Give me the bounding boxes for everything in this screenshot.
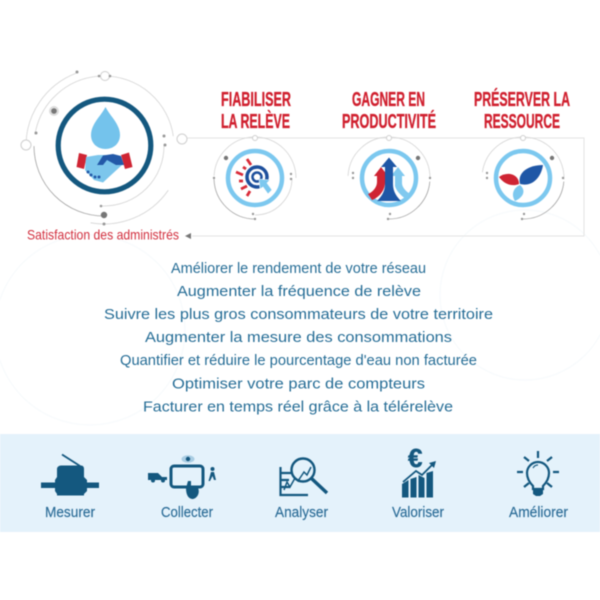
step: analyser bbox=[275, 458, 328, 521]
icon: leaves bbox=[499, 165, 543, 201]
panel: productivité badge bbox=[345, 134, 433, 222]
heading: fiabiliser bbox=[221, 88, 291, 133]
panel: ressource badge bbox=[477, 132, 569, 224]
step: mesurer bbox=[41, 454, 99, 521]
text block: benefits list: Suivre les plus gros consommateurs de votre territoire bbox=[104, 306, 493, 323]
step: collecter bbox=[148, 455, 216, 521]
text block: benefits list: Quantifier et réduire le pourcentage d'eau non facturée bbox=[120, 352, 477, 369]
panel: satisfaction badge bbox=[0, 37, 213, 255]
text block: benefits list: Facturer en temps réel grâce à la télérelève bbox=[143, 398, 453, 416]
text block: benefits list: Améliorer le rendement de votre réseau bbox=[171, 260, 426, 277]
heading: gagner bbox=[342, 88, 436, 133]
heading: gagner: PRODUCTIVITÉ bbox=[342, 110, 436, 133]
step: valoriser: € bbox=[408, 443, 422, 473]
connector frame bbox=[187, 138, 584, 236]
panel: steps band bbox=[0, 434, 600, 532]
step: valoriser: Valoriser bbox=[392, 505, 444, 521]
text block: benefits list: Optimiser votre parc de compteurs bbox=[172, 376, 425, 392]
icon: water drop bbox=[91, 107, 120, 149]
text block: benefits list: Augmenter la mesure des consommations bbox=[145, 329, 452, 346]
icon: target click bbox=[236, 159, 272, 196]
text block: benefits list bbox=[104, 260, 493, 416]
step: améliorer bbox=[509, 451, 568, 521]
step: collecter: Collecter bbox=[161, 505, 213, 521]
main ring bbox=[58, 99, 151, 192]
step: valoriser bbox=[392, 443, 444, 521]
step: analyser: Analyser bbox=[275, 505, 328, 521]
label: satisfaction: Satisfaction des administrés bbox=[27, 226, 179, 242]
text block: benefits list: Augmenter la fréquence de relève bbox=[177, 283, 421, 300]
heading: gagner: GAGNER EN bbox=[352, 88, 425, 111]
step: améliorer: Améliorer bbox=[509, 505, 568, 521]
icon: handshake bbox=[76, 152, 132, 182]
heading: fiabiliser: FIABILISER bbox=[221, 88, 291, 111]
orbit decoration bbox=[0, 37, 213, 255]
heading: preserver bbox=[474, 88, 570, 133]
step: mesurer: Mesurer bbox=[45, 505, 95, 521]
panel: fiabiliser badge bbox=[212, 135, 298, 221]
icon: arrows bbox=[368, 158, 410, 201]
heading: fiabiliser: LA RELÈVE bbox=[221, 110, 290, 133]
